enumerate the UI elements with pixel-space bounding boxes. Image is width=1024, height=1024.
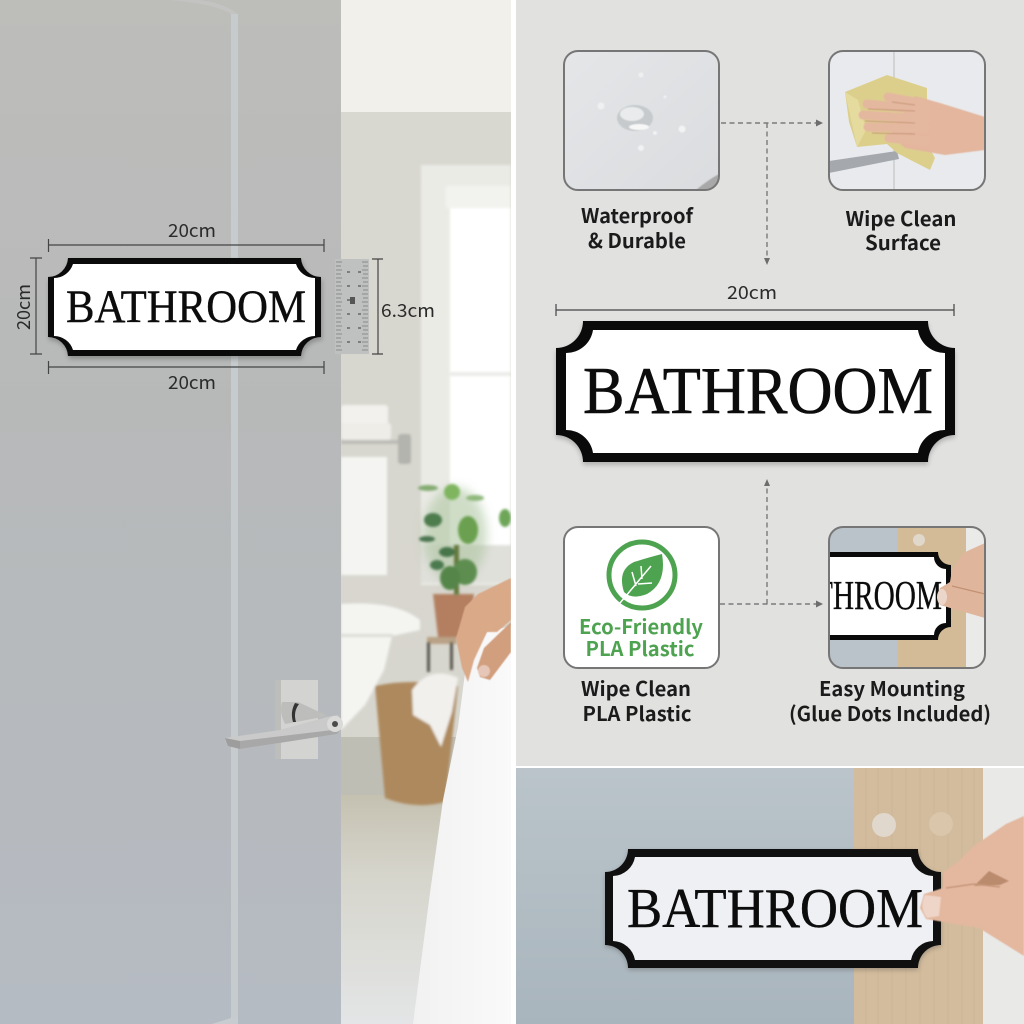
feature label: waterproof: & Durable	[588, 225, 686, 254]
hand pressing sign	[920, 816, 1024, 956]
panel: bathroom door photo	[0, 0, 511, 1024]
plant	[418, 484, 511, 595]
door sign with shadow: BATHROOM	[66, 281, 306, 333]
feature card: eco-friendly	[564, 527, 719, 668]
arrow: top connector	[721, 120, 823, 265]
dimension: main sign width: 20cm	[727, 279, 777, 305]
mounted bathroom sign: BATHROOM	[627, 878, 923, 940]
ruler	[335, 259, 369, 354]
feature card: eco-friendly: Eco-Friendly	[579, 611, 704, 640]
feature card: easy mounting	[815, 527, 985, 668]
feature label: easy mounting: Easy Mounting	[819, 673, 965, 702]
door handle	[225, 680, 343, 759]
dimension: bottom width: 20cm	[168, 369, 216, 395]
feature label: wipe clean surface	[846, 203, 956, 256]
dimension: ruler height: 6.3cm	[381, 297, 435, 323]
dimension: main sign width	[556, 279, 954, 316]
feature card: waterproof	[564, 51, 719, 190]
feature label: waterproof: Waterproof	[581, 200, 695, 229]
white towel	[413, 626, 511, 1024]
feature label: easy mounting: (Glue Dots Included)	[789, 698, 991, 727]
main bathroom sign	[556, 321, 955, 465]
dimension: bottom width	[48, 361, 324, 395]
feature label: PLA plastic: PLA Plastic	[582, 698, 692, 727]
panel: features	[516, 0, 1024, 766]
arrow: bottom connector	[720, 479, 823, 608]
hand holding towel	[456, 578, 511, 682]
feature label: PLA plastic	[581, 673, 692, 727]
panel: sign mounted on wall	[516, 768, 1024, 1024]
door	[0, 0, 341, 1024]
wall and wood background	[516, 768, 1024, 1024]
door sign with shadow	[48, 258, 322, 359]
feature label: wipe clean surface: Wipe Clean	[846, 203, 956, 232]
panel background	[516, 0, 1024, 766]
dimension: ruler height	[372, 259, 435, 354]
feature label: waterproof	[581, 200, 695, 254]
dimension: top width	[48, 217, 324, 252]
dimension: left height: 20cm	[10, 284, 36, 330]
mounted bathroom sign	[605, 849, 941, 970]
feature card: eco-friendly: PLA Plastic	[586, 633, 694, 662]
feature card: easy mounting: THROOM	[815, 572, 942, 618]
icon: leaf in circle	[609, 542, 675, 608]
feature label: wipe clean surface: Surface	[865, 227, 941, 256]
feature card: wipe clean	[829, 51, 985, 190]
feature label: easy mounting	[789, 673, 991, 727]
dimension: top width: 20cm	[168, 217, 216, 243]
bathroom interior scene	[341, 0, 511, 1024]
main bathroom sign: BATHROOM	[583, 354, 933, 428]
feature label: PLA plastic: Wipe Clean	[581, 673, 691, 702]
glue dots	[872, 812, 953, 837]
dimension: left height	[10, 258, 42, 354]
